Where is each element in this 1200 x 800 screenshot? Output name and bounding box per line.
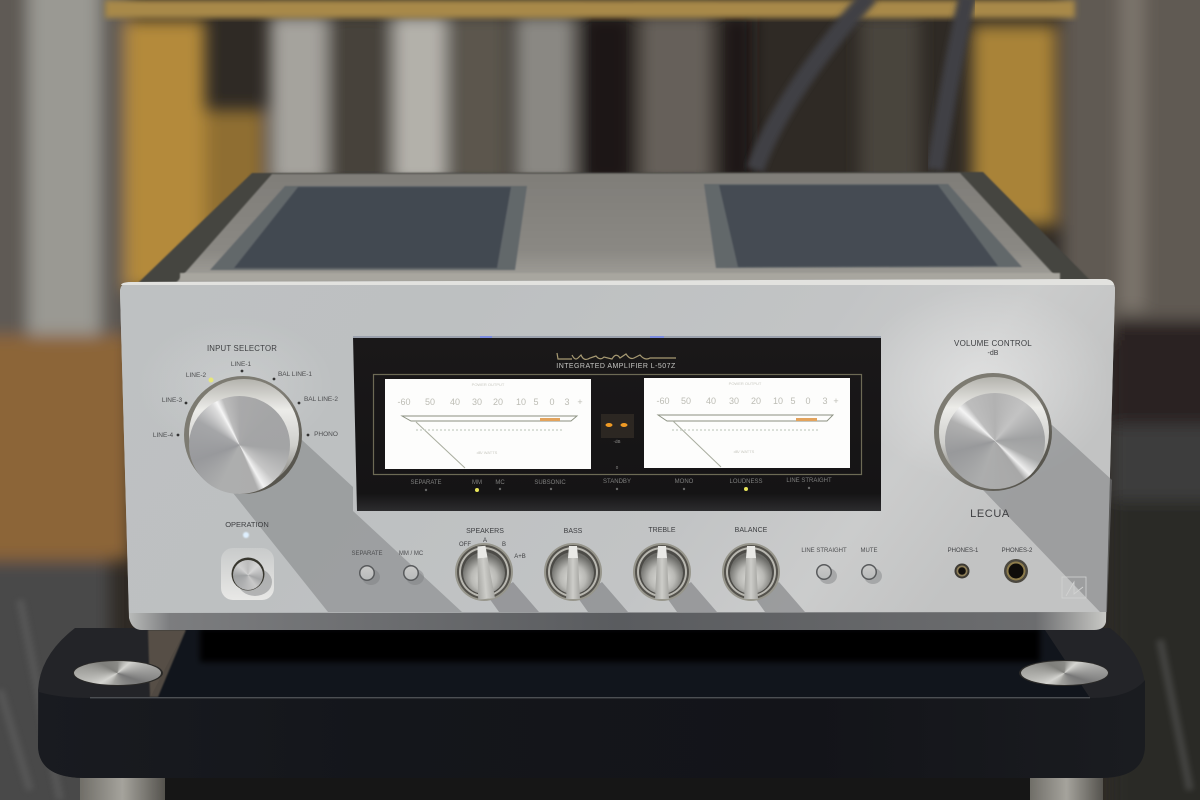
bass knob [544, 528, 602, 601]
input selector labels: BAL LINE-1 [278, 371, 312, 378]
center peak LEDs [601, 414, 634, 470]
status indicators: MM [472, 480, 482, 486]
speakers selector labels: A [483, 538, 487, 544]
amplifier stand [38, 628, 1145, 800]
input selector labels: BAL LINE-2 [304, 396, 338, 403]
left VU meter: 20 [493, 397, 503, 407]
amplifier front panel [120, 279, 1115, 630]
status indicators: MC [495, 480, 505, 486]
operation switch [221, 520, 274, 600]
left footer disc face [74, 661, 161, 685]
right VU meter: 0 [805, 396, 811, 406]
left VU meter: 5 [533, 397, 539, 407]
cast shadow: volume control [983, 425, 1112, 612]
right footer disc face [1021, 661, 1108, 685]
operation switch: OPERATION [225, 520, 269, 529]
left VU meter: 3 [564, 397, 570, 407]
meter bezel [374, 374, 862, 474]
input selector knob face [189, 396, 290, 494]
input selector knob body [184, 376, 302, 494]
left VU meter: 0 [549, 397, 555, 407]
speakers selector labels [459, 528, 526, 560]
status indicators [410, 478, 832, 492]
right VU meter: 20 [751, 396, 761, 406]
speakers selector labels: SPEAKERS [466, 528, 504, 535]
left VU meter: 50 [425, 397, 435, 407]
meter display window [353, 336, 881, 511]
input selector labels [153, 344, 338, 439]
cast shadow: input selector [233, 440, 462, 612]
power button face [233, 560, 263, 590]
headphone jacks: PHONES-1 [948, 548, 979, 554]
left VU meter: 40 [450, 397, 460, 407]
small push buttons and labels: SEPARATE [351, 551, 383, 557]
treble knob: TREBLE [648, 527, 676, 534]
volume control labels: VOLUME CONTROL [954, 339, 1032, 348]
status indicators: SEPARATE [410, 480, 442, 486]
right VU meter: 10 [773, 396, 783, 406]
right VU meter: 40 [706, 396, 716, 406]
right ventilation window [704, 184, 1022, 268]
small push buttons and labels: LINE STRAIGHT [801, 548, 847, 554]
small push buttons and labels: MUTE [860, 548, 878, 554]
Luxman logo: Luxman [560, 358, 564, 360]
status indicators: STANDBY [603, 479, 631, 485]
speakers selector labels: A+B [514, 554, 526, 560]
left ventilation window [210, 186, 527, 270]
status indicators: SUBSONIC [534, 480, 566, 486]
stand footer discs [73, 660, 1109, 686]
volume control labels: -dB [988, 350, 999, 357]
input selector labels: LINE-2 [186, 372, 206, 379]
model name: INTEGRATED AMPLIFIER L-507Z [556, 363, 676, 370]
left VU meter: -60 [397, 397, 411, 407]
left VU meter: dB/ WATTS [477, 450, 498, 455]
status indicators: LINE STRAIGHT [786, 478, 832, 484]
treble knob [633, 527, 691, 601]
right VU meter [644, 378, 850, 468]
volume knob face [945, 393, 1045, 489]
input selector labels: PHONO [314, 431, 338, 438]
right VU meter: 50 [681, 396, 691, 406]
stand legs [80, 775, 1103, 800]
balance knob: BALANCE [735, 527, 768, 534]
amplifier top cover [138, 172, 1092, 283]
volume control labels: LECUA [970, 508, 1010, 520]
volume control labels [954, 339, 1032, 520]
small push buttons and labels [351, 548, 882, 585]
Luxman emblem [1062, 577, 1086, 598]
volume knob body [934, 373, 1052, 491]
input selector labels: INPUT SELECTOR [207, 344, 277, 353]
right VU meter: -60 [656, 396, 670, 406]
stand front face [38, 680, 1145, 778]
left VU meter: 10 [516, 397, 526, 407]
headphone jacks: PHONES-2 [1002, 548, 1033, 554]
balance knob [722, 527, 780, 601]
input selector labels: LINE-1 [231, 361, 251, 368]
left VU meter: + [577, 397, 583, 407]
right VU meter: 5 [790, 396, 796, 406]
right VU meter: POWER OUTPUT [729, 381, 762, 386]
right VU meter: + [833, 396, 839, 406]
right VU meter: 30 [729, 396, 739, 406]
left VU meter: POWER OUTPUT [472, 382, 505, 387]
input selector labels: LINE-4 [153, 432, 173, 439]
headphone jacks [948, 548, 1033, 583]
status indicators: MONO [675, 479, 694, 485]
speakers selector labels: B [502, 542, 506, 548]
center peak LEDs: 0 [616, 465, 619, 470]
stand top surface [150, 630, 1090, 698]
right VU meter: 3 [822, 396, 828, 406]
speakers knob [455, 543, 513, 601]
small push buttons and labels: MM / MC [399, 551, 424, 557]
speakers selector labels: OFF [459, 542, 471, 548]
left VU meter: 30 [472, 397, 482, 407]
center peak LEDs: -dB [613, 439, 621, 444]
bass knob: BASS [564, 528, 583, 535]
Luxman logo [557, 353, 676, 360]
left VU meter [385, 379, 591, 469]
right VU meter: dB/ WATTS [734, 449, 755, 454]
input selector labels: LINE-3 [162, 397, 182, 404]
status indicators: LOUDNESS [729, 479, 763, 485]
cast shadows: small knobs [489, 582, 805, 612]
